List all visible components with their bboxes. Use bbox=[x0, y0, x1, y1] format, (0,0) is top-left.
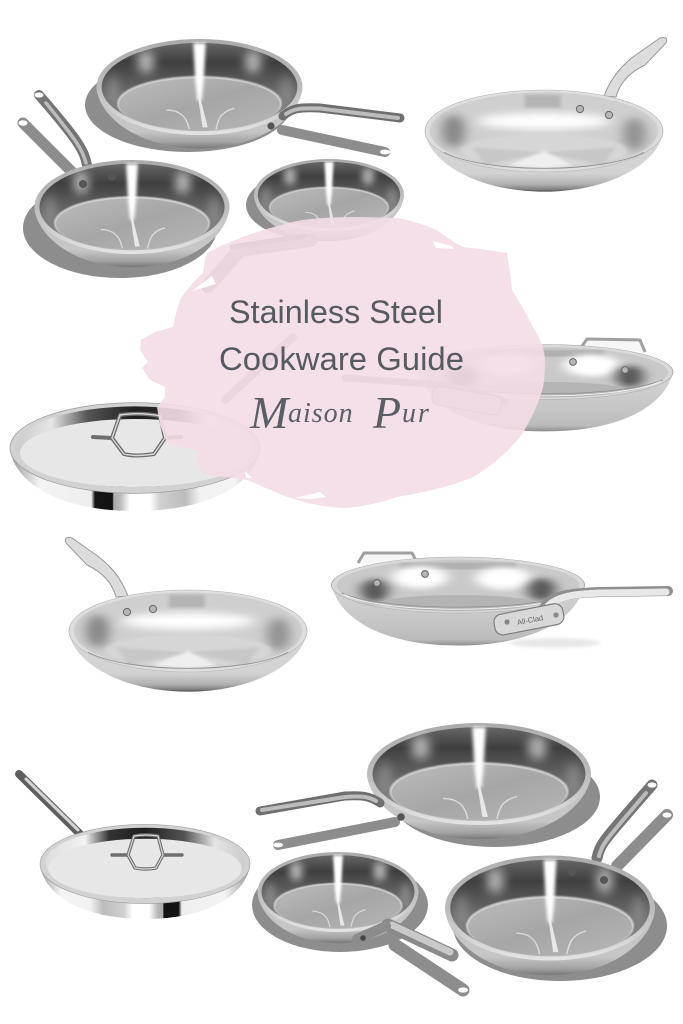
plate with embossed brand: All-Clad bbox=[516, 613, 544, 627]
pan: small dark skillet bbox=[208, 159, 404, 286]
script brand name: P bbox=[372, 387, 401, 438]
pan: medium dark skillet bbox=[445, 782, 672, 981]
pan: small dark skillet bbox=[252, 852, 468, 993]
pan: mid right low-angle skillet with handle bbox=[332, 553, 668, 648]
script brand name: M bbox=[249, 387, 291, 438]
script brand name: aison bbox=[288, 398, 354, 429]
pan: lidded pan at left bbox=[10, 337, 293, 511]
pan: large dark skillet bbox=[85, 39, 400, 154]
pan set: top left group bbox=[18, 39, 404, 286]
pan: bottom left lidded pan bbox=[19, 774, 250, 919]
pan: medium dark skillet bbox=[18, 92, 230, 278]
plate with embossed brand bbox=[493, 602, 565, 636]
pan set: bottom right group bbox=[252, 723, 672, 993]
pink brush blob bbox=[140, 217, 545, 508]
script brand name: ur bbox=[402, 398, 431, 429]
title line 1: Stainless Steel bbox=[229, 294, 443, 330]
pan: middle right low-angle skillet bbox=[345, 339, 673, 431]
title line 2: Cookware Guide bbox=[219, 341, 464, 377]
pan: mid left bright skillet bbox=[65, 538, 307, 692]
pan: large dark skillet bbox=[260, 723, 600, 847]
pan: top right bright skillet bbox=[425, 38, 667, 192]
pink brush blob with title bbox=[140, 217, 545, 508]
